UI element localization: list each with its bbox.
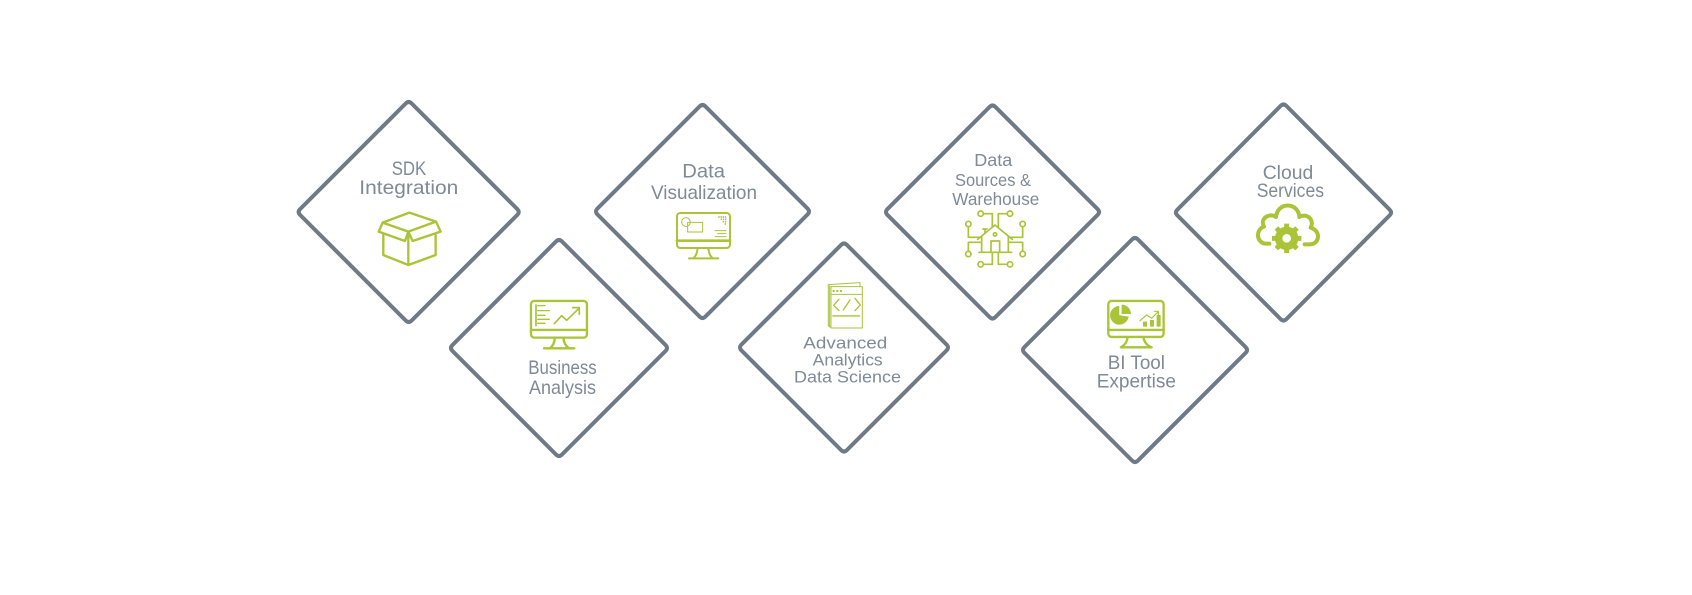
- heading: SDK Integration: Integration: [359, 177, 458, 199]
- diamond outline: [1023, 238, 1247, 462]
- heading: Data Sources & Warehouse: Sources &: [955, 170, 1031, 190]
- panel: SDK Integration: [299, 102, 519, 322]
- heading: Data Visualization: [651, 160, 757, 204]
- heading: Advanced Analytics Data Science: Analytics: [813, 351, 883, 369]
- heading: Cloud Services: Services: [1257, 180, 1324, 202]
- diamond outline: [740, 244, 948, 452]
- heading: Data Visualization: Data: [682, 160, 725, 182]
- icon: code document: [828, 283, 862, 328]
- heading: Business Analysis: Analysis: [529, 377, 596, 399]
- heading: Cloud Services: Cloud: [1263, 162, 1313, 184]
- icon: open box: [379, 213, 441, 265]
- heading: Business Analysis: [528, 357, 597, 399]
- diamond outline: [299, 102, 519, 322]
- panel: Cloud Services: [1176, 104, 1391, 320]
- panel: Data Sources & Warehouse: [886, 106, 1099, 318]
- heading: Data Sources & Warehouse: Warehouse: [952, 189, 1039, 209]
- heading: BI Tool Expertise: [1097, 352, 1176, 393]
- diamond outline: [1176, 104, 1391, 320]
- diamond outline: [451, 240, 667, 456]
- heading: Data Visualization: Visualization: [651, 182, 757, 204]
- heading: Data Sources & Warehouse: Data: [974, 150, 1013, 170]
- icon: monitor with pie and bars: [1108, 301, 1164, 347]
- heading: Advanced Analytics Data Science: Data Science: [794, 368, 901, 386]
- heading: BI Tool Expertise: Expertise: [1097, 371, 1176, 393]
- icon: monitor with diagram: [677, 213, 730, 258]
- heading: SDK Integration: [359, 158, 458, 199]
- diamond outline: [886, 106, 1099, 318]
- panel: BI Tool Expertise: [1023, 238, 1247, 462]
- heading: SDK Integration: SDK: [392, 158, 426, 180]
- panel: Business Analysis: [451, 240, 667, 456]
- panel: Advanced Analytics Data Science: [740, 244, 948, 452]
- heading: Advanced Analytics Data Science: Advanced: [803, 334, 887, 352]
- diamond outline: [596, 105, 809, 318]
- heading: Business Analysis: Business: [528, 357, 597, 379]
- panel: Data Visualization: [596, 105, 809, 318]
- heading: Data Sources & Warehouse: [952, 150, 1039, 209]
- heading: Cloud Services: [1257, 162, 1324, 202]
- heading: Advanced Analytics Data Science: [794, 334, 901, 386]
- icon: cloud with gear: [1258, 205, 1318, 253]
- icon: house with circuit lines: [966, 211, 1025, 267]
- icon: monitor with trend line: [531, 301, 587, 348]
- heading: BI Tool Expertise: BI Tool: [1108, 352, 1165, 374]
